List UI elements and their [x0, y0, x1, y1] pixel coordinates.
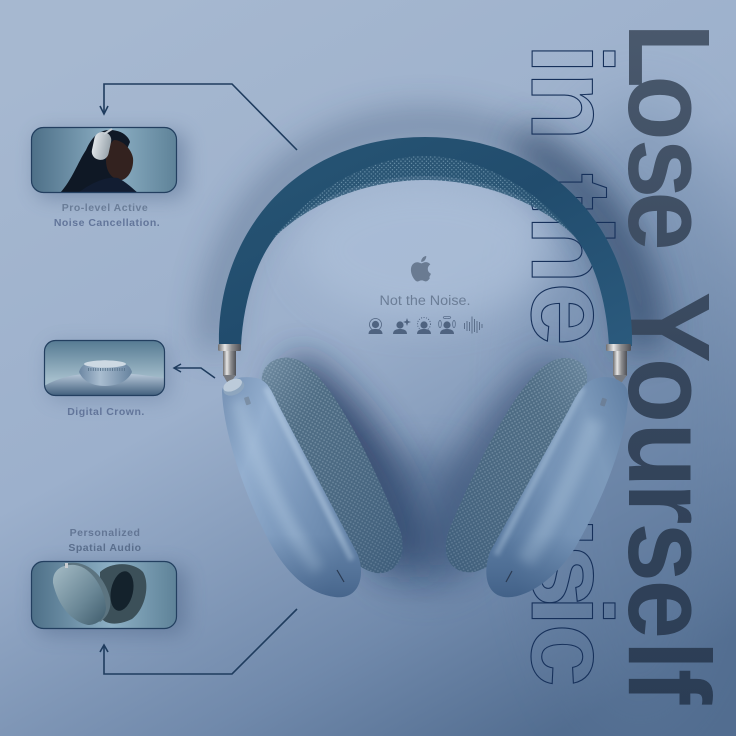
right ear cup shell — [486, 377, 628, 598]
headband mesh — [272, 156, 578, 240]
panel: digital crown — [44, 340, 170, 400]
icon: apple logo — [411, 256, 431, 281]
text: Noise Cancellation. — [54, 217, 160, 229]
headband — [219, 137, 632, 346]
headphone drop shadows — [214, 125, 645, 590]
icon: person with rays — [417, 318, 431, 334]
icon: person with sparkle — [393, 318, 411, 334]
right ear cushion — [446, 358, 587, 572]
image: ear cups — [31, 561, 177, 629]
digital crown knob — [220, 375, 247, 399]
left ear cushion — [262, 358, 403, 573]
arrow: to spatial audio — [100, 609, 297, 674]
icon: person with ring — [368, 318, 382, 334]
caption: noise cancellation: Pro-level Active — [62, 202, 148, 214]
text: Spatial Audio — [68, 542, 142, 554]
image: crown close-up — [44, 340, 165, 396]
title: Lose Yourself: Lose Yourself — [604, 23, 734, 705]
panel: spatial audio — [31, 561, 186, 634]
caption: spatial audio: Personalized — [70, 527, 140, 539]
outlined title: in the music: in the music — [507, 43, 634, 687]
left stem — [218, 344, 241, 382]
panel: noise cancellation — [31, 127, 186, 198]
arrow: to noise cancellation — [100, 84, 297, 150]
arrow: to digital crown — [174, 364, 215, 378]
tagline: Not the Noise. — [380, 293, 470, 308]
caption: digital crown: Digital Crown. — [67, 406, 145, 418]
left ear cup shell — [222, 377, 361, 598]
photo: woman wearing headphones — [31, 127, 177, 193]
headphones — [215, 137, 635, 605]
feature icons row — [368, 316, 482, 334]
icon: waveform — [464, 316, 482, 334]
right stem — [606, 344, 631, 382]
icon: person with halo — [439, 316, 455, 334]
